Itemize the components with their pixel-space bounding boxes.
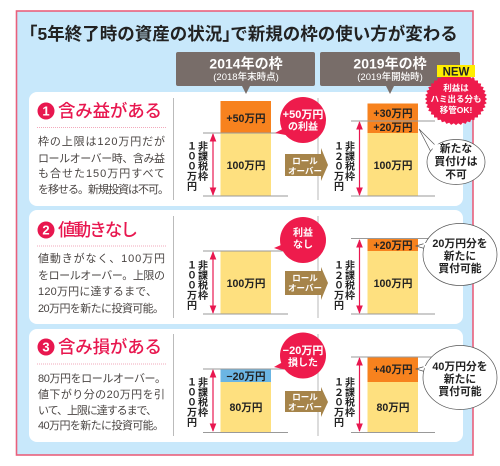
bar: 2014 — [203, 369, 288, 432]
panel: 値動きなし — [29, 210, 463, 324]
bar: 2019: +40万円 — [373, 364, 413, 376]
badge: NEW burst — [425, 65, 487, 125]
description text: 値動きがなく、100万円 — [38, 251, 165, 265]
arrow: ロールオーバー: ロール — [292, 273, 318, 283]
vertical label: 非課税枠100万円 — [184, 140, 208, 191]
arrow: ロールオーバー: オーバー — [288, 283, 322, 293]
callout: −20万円損した: 損した — [288, 356, 318, 369]
callout: −20万円損した — [274, 332, 326, 378]
burst shape — [425, 73, 487, 125]
bar: 2014 — [203, 101, 288, 196]
vertical label: 非課税枠120万円: １２０万円 — [332, 141, 344, 191]
description text: 値下がり分の20万円を引 — [38, 387, 165, 401]
callout: 40万円分を新たに買付可能: 買付可能 — [438, 384, 482, 398]
bar: 2019: +20万円 — [373, 240, 413, 252]
bar: 2019 — [351, 357, 435, 432]
callout: +50万円の利益: の利益 — [288, 120, 318, 133]
heading: 含み益がある: 含み益がある — [58, 101, 162, 121]
callout: 新たな買付けは不可: 新たな — [440, 141, 472, 155]
vertical label: 非課税枠100万円: 非課税枠 — [196, 376, 208, 418]
vertical label: 非課税枠100万円: １００万円 — [184, 141, 196, 191]
bar: 2014: +50万円 — [226, 113, 266, 125]
description text: も合せた150万円すべて — [38, 167, 165, 180]
header tab: 2019年の枠 — [320, 52, 460, 94]
limit arrow: 100万円 — [212, 134, 214, 195]
vertical label: 非課税枠120万円: 非課税枠 — [342, 140, 354, 182]
heading: 値動きなし: 値動きなし — [58, 220, 138, 240]
description text — [38, 251, 165, 315]
arrow: ロールオーバー — [285, 387, 328, 417]
arrow: ロールオーバー: ロール — [292, 392, 318, 402]
bar: 2014: 80万円 — [230, 402, 262, 414]
callout: −20万円損した: −20万円 — [283, 344, 323, 357]
arrow: ロールオーバー: オーバー — [288, 402, 322, 412]
bar: 2019 — [351, 238, 435, 314]
badge: NEW burst: 移管OK! — [440, 105, 472, 115]
bar: 2019 — [351, 104, 435, 196]
description text — [38, 134, 169, 196]
callout: +50万円の利益: +50万円 — [283, 108, 323, 121]
badge: NEW burst: ハミ出る分も — [430, 94, 482, 104]
vertical label: 非課税枠120万円 — [332, 259, 354, 310]
vertical label: 非課税枠100万円 — [184, 259, 208, 310]
description text: をロールオーバー。上限の — [38, 269, 165, 282]
vertical label: 非課税枠100万円: １００万円 — [184, 377, 196, 427]
bar: 2014: 100万円 — [227, 160, 265, 172]
bar: 2014: −20万円 — [226, 371, 266, 383]
limit arrow: 100万円 — [212, 252, 214, 313]
description text: 120万円に達するまで、 — [38, 285, 157, 298]
limit arrow: 120万円 — [358, 358, 360, 431]
vertical label: 非課税枠120万円: 非課税枠 — [342, 376, 354, 418]
header tab: 2014年の枠: 2014年の枠 — [209, 56, 283, 72]
header tab: 2014年の枠: (2018年末時点) — [213, 71, 279, 83]
callout: 20万円分を新たに買付可能: 買付可能 — [438, 261, 482, 275]
bar: 2019: 100万円 — [374, 278, 412, 290]
callout: 40万円分を新たに買付可能: 新たに — [444, 372, 476, 386]
description text: 40万円を新たに投資可能。 — [38, 418, 164, 432]
limit arrow: 120万円 — [358, 122, 360, 195]
bar: 2019: 100万円 — [374, 160, 412, 172]
arrow: ロールオーバー — [285, 267, 328, 300]
vertical label: 非課税枠120万円: １２０万円 — [332, 260, 344, 310]
callout: 利益なし: 利益 — [293, 226, 313, 239]
callout: 利益なし — [274, 217, 326, 263]
vertical label: 非課税枠120万円 — [332, 376, 354, 427]
panel: 含み益がある — [29, 92, 463, 206]
vertical label: 非課税枠120万円: 非課税枠 — [342, 259, 354, 301]
callout: 20万円分を新たに買付可能: 20万円分を — [432, 236, 488, 250]
callout: 新たな買付けは不可 — [419, 129, 485, 184]
description text: いて、上限に達するまで、 — [38, 404, 157, 417]
description text: 20万円を新たに投資可能。 — [38, 301, 164, 315]
description text: ロールオーバー時、含み益 — [38, 151, 165, 165]
description text: を移せる。新規投資は不可。 — [38, 182, 169, 196]
vertical label: 非課税枠120万円 — [332, 140, 354, 191]
NEW label: NEW — [443, 66, 470, 78]
header tab: 2014年の枠 — [176, 52, 315, 94]
badge: NEW burst: 利益は — [443, 83, 469, 93]
arrow: ロールオーバー: オーバー — [288, 166, 322, 176]
description text — [38, 372, 166, 432]
callout: 新たな買付けは不可: 買付けは — [434, 154, 478, 168]
description text: 80万円をロールオーバー。 — [38, 372, 166, 385]
vertical label: 非課税枠100万円: １００万円 — [184, 260, 196, 310]
vertical label: 非課税枠100万円 — [184, 376, 208, 427]
header tab: 2019年の枠: (2019年開始時) — [357, 71, 423, 83]
header tab: 2019年の枠: 2019年の枠 — [353, 56, 427, 72]
bar: 2014: 100万円 — [227, 278, 265, 290]
callout: 40万円分を新たに買付可能: 40万円分を — [432, 359, 488, 373]
heading: 含み損がある: 含み損がある — [58, 337, 162, 357]
heading: 含み損がある: 3 — [42, 340, 50, 354]
bar: 2019: +20万円 — [373, 122, 413, 134]
bar: 2019: +30万円 — [373, 108, 413, 120]
heading: 値動きなし: 2 — [42, 222, 50, 238]
bar: 2019: 80万円 — [377, 402, 409, 414]
arrow: ロールオーバー — [285, 148, 328, 181]
callout: 20万円分を新たに買付可能 — [416, 224, 497, 286]
heading: 含み益がある: 1 — [42, 104, 50, 118]
description text: 枠の上限は120万円だが — [38, 134, 165, 148]
panel: 含み損がある — [29, 329, 463, 442]
limit arrow: 120万円 — [358, 240, 360, 313]
callout: +50万円の利益 — [275, 97, 326, 143]
callout: 新たな買付けは不可: 不可 — [445, 168, 467, 181]
vertical label: 非課税枠100万円: 非課税枠 — [196, 259, 208, 301]
callout: 利益なし: なし — [293, 239, 313, 251]
title: 「5年終了時の資産の状況」で新規の枠の使い方が変わる — [20, 24, 458, 44]
bar: 2014 — [203, 251, 288, 314]
callout: 40万円分を新たに買付可能 — [416, 346, 497, 410]
vertical label: 非課税枠120万円: １２０万円 — [332, 377, 344, 427]
arrow: ロールオーバー: ロール — [292, 156, 318, 166]
callout: 20万円分を新たに買付可能: 新たに — [444, 248, 476, 262]
vertical label: 非課税枠100万円: 非課税枠 — [196, 140, 208, 182]
limit arrow: 100万円 — [212, 370, 214, 431]
